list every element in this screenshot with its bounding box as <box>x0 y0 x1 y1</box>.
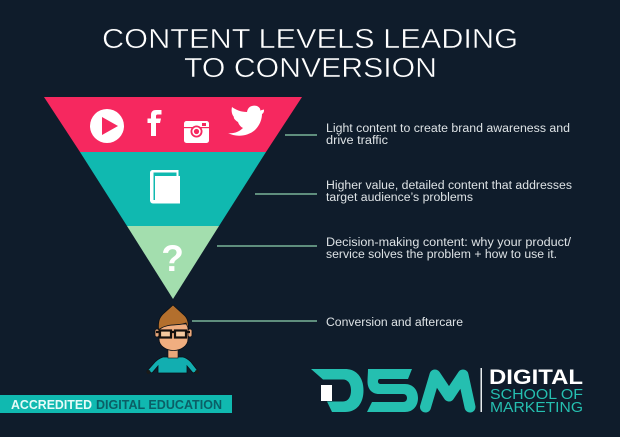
glasses <box>156 330 190 338</box>
title: TO CONVERSION <box>184 52 437 83</box>
funnel tier: decision content <box>127 226 219 299</box>
logo text <box>489 366 583 416</box>
hair <box>158 305 188 329</box>
text: conversion: Conversion and aftercare <box>326 317 463 329</box>
logo mark: S <box>367 369 418 412</box>
text: light content <box>326 123 570 147</box>
banner: accredited digital education: DIGITAL EDUCATION <box>96 398 222 412</box>
title <box>102 23 518 83</box>
text: light content: drive traffic <box>326 135 388 147</box>
neck <box>168 348 178 358</box>
shirt and arms <box>147 357 198 373</box>
banner: accredited digital education <box>0 395 232 413</box>
funnel <box>44 97 302 299</box>
icon: twitter bird <box>228 106 264 136</box>
text: decision content <box>326 237 572 261</box>
icon: question mark: ? <box>161 238 184 279</box>
logo mark: M <box>426 375 470 407</box>
logo text: MARKETING <box>490 400 583 416</box>
logo: DSM <box>311 366 583 416</box>
funnel tier: detailed content <box>80 152 266 226</box>
text: detailed content <box>326 180 572 204</box>
logo text: DIGITAL <box>489 366 583 389</box>
leader line: tier 1 <box>285 134 317 136</box>
leader line: tier 2 <box>255 193 317 195</box>
title: CONTENT LEVELS LEADING <box>102 23 518 54</box>
text: decision content: Decision-making content: why your product/ <box>326 237 572 249</box>
leader line: tier 4 <box>192 320 317 322</box>
banner: accredited digital education: ACCREDITED <box>11 398 92 412</box>
text: detailed content: target audience’s problems <box>326 192 473 204</box>
hands <box>146 370 150 374</box>
text: detailed content: Higher value, detailed content that addresses <box>326 180 572 192</box>
ears <box>155 329 159 337</box>
text: light content: Light content to create brand awareness and <box>326 123 570 135</box>
leader line: tier 3 <box>217 245 317 247</box>
character: person with glasses <box>146 305 199 374</box>
logo mark: D <box>311 369 364 412</box>
logo text: SCHOOL OF <box>490 387 583 403</box>
face <box>159 324 188 350</box>
icon: facebook <box>148 110 162 136</box>
icon: play button <box>90 109 124 143</box>
funnel tier: light content <box>44 97 302 152</box>
icon: instagram <box>184 121 209 143</box>
logo divider <box>480 368 482 412</box>
text: decision content: service solves the problem + how to use it. <box>326 249 557 261</box>
icon: book <box>150 170 180 204</box>
